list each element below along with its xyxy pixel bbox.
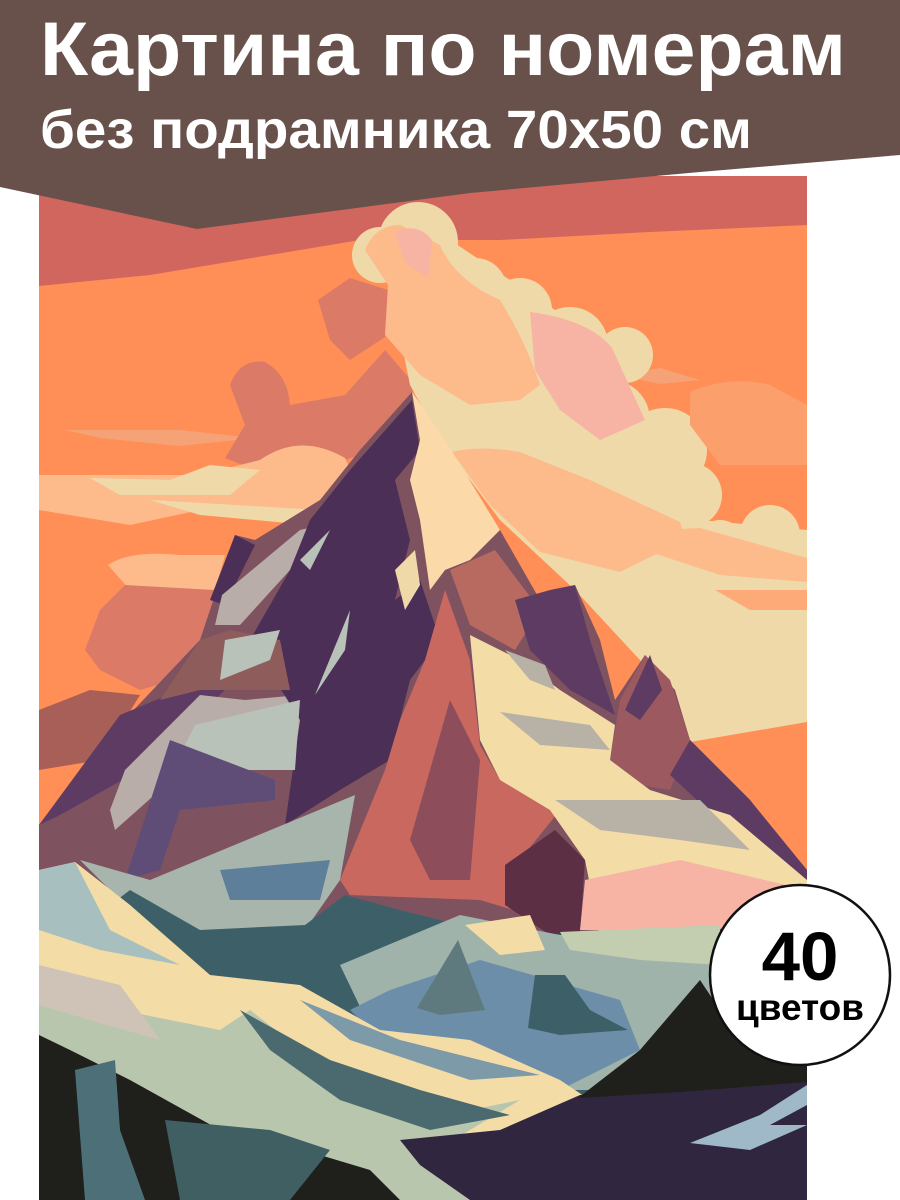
cloud: left banks <box>39 445 355 525</box>
mountain: light rock streaks <box>180 530 350 770</box>
badge: 40 colours <box>710 885 890 1065</box>
foreground: pale streaks right <box>690 1085 807 1150</box>
cloud: mauve bank at left <box>85 585 215 690</box>
mountain: cream snowfield on the right <box>470 635 807 940</box>
foreground: dark rocks at left <box>39 1035 400 1200</box>
badge label: цветов <box>736 987 864 1028</box>
mountain: salmon lit face <box>340 590 580 930</box>
cloud: mauve smoke behind the peak <box>225 350 415 472</box>
mountain: right crags <box>515 585 615 715</box>
mountain: dark mauve mid buttress <box>160 630 290 700</box>
foreground: snow slope left <box>39 862 590 1200</box>
mountain: cream summit snow <box>410 392 500 590</box>
foreground: dark purple ridge right <box>400 1065 807 1200</box>
title: Картина по номерам <box>40 7 846 92</box>
foreground: shadow streaks on snow <box>240 1010 510 1130</box>
mountain: left ridge purple shadows <box>39 660 225 825</box>
lowland: dark triangles in valley <box>417 940 485 1015</box>
painting: mountain at sunset <box>39 176 807 1200</box>
header banner <box>0 0 900 229</box>
sky: orange field <box>39 225 807 900</box>
mountain: violet lower left slab <box>125 740 275 880</box>
cloud: cream cumulus silhouette <box>352 202 807 742</box>
mountain: grey snow on left shoulder <box>215 522 335 625</box>
cloud: right side patch <box>690 381 807 465</box>
mountain: main purple face <box>250 400 440 825</box>
cloud: right lower bands <box>612 528 807 582</box>
sky: coral top band <box>39 176 807 376</box>
lowland: pale green horizon band <box>560 925 720 965</box>
mountain: main body <box>39 392 807 960</box>
subtitle: без подрамника 70х50 см <box>40 100 752 160</box>
lowland: pink horizon <box>580 860 807 930</box>
sky: pale thin streaks <box>65 368 700 446</box>
lowland: grey-green shoulder <box>80 795 355 960</box>
cloud: peach and pink highlights <box>365 225 540 405</box>
lowland: blue-green valley <box>39 890 807 1100</box>
badge number: 40 <box>762 918 838 995</box>
